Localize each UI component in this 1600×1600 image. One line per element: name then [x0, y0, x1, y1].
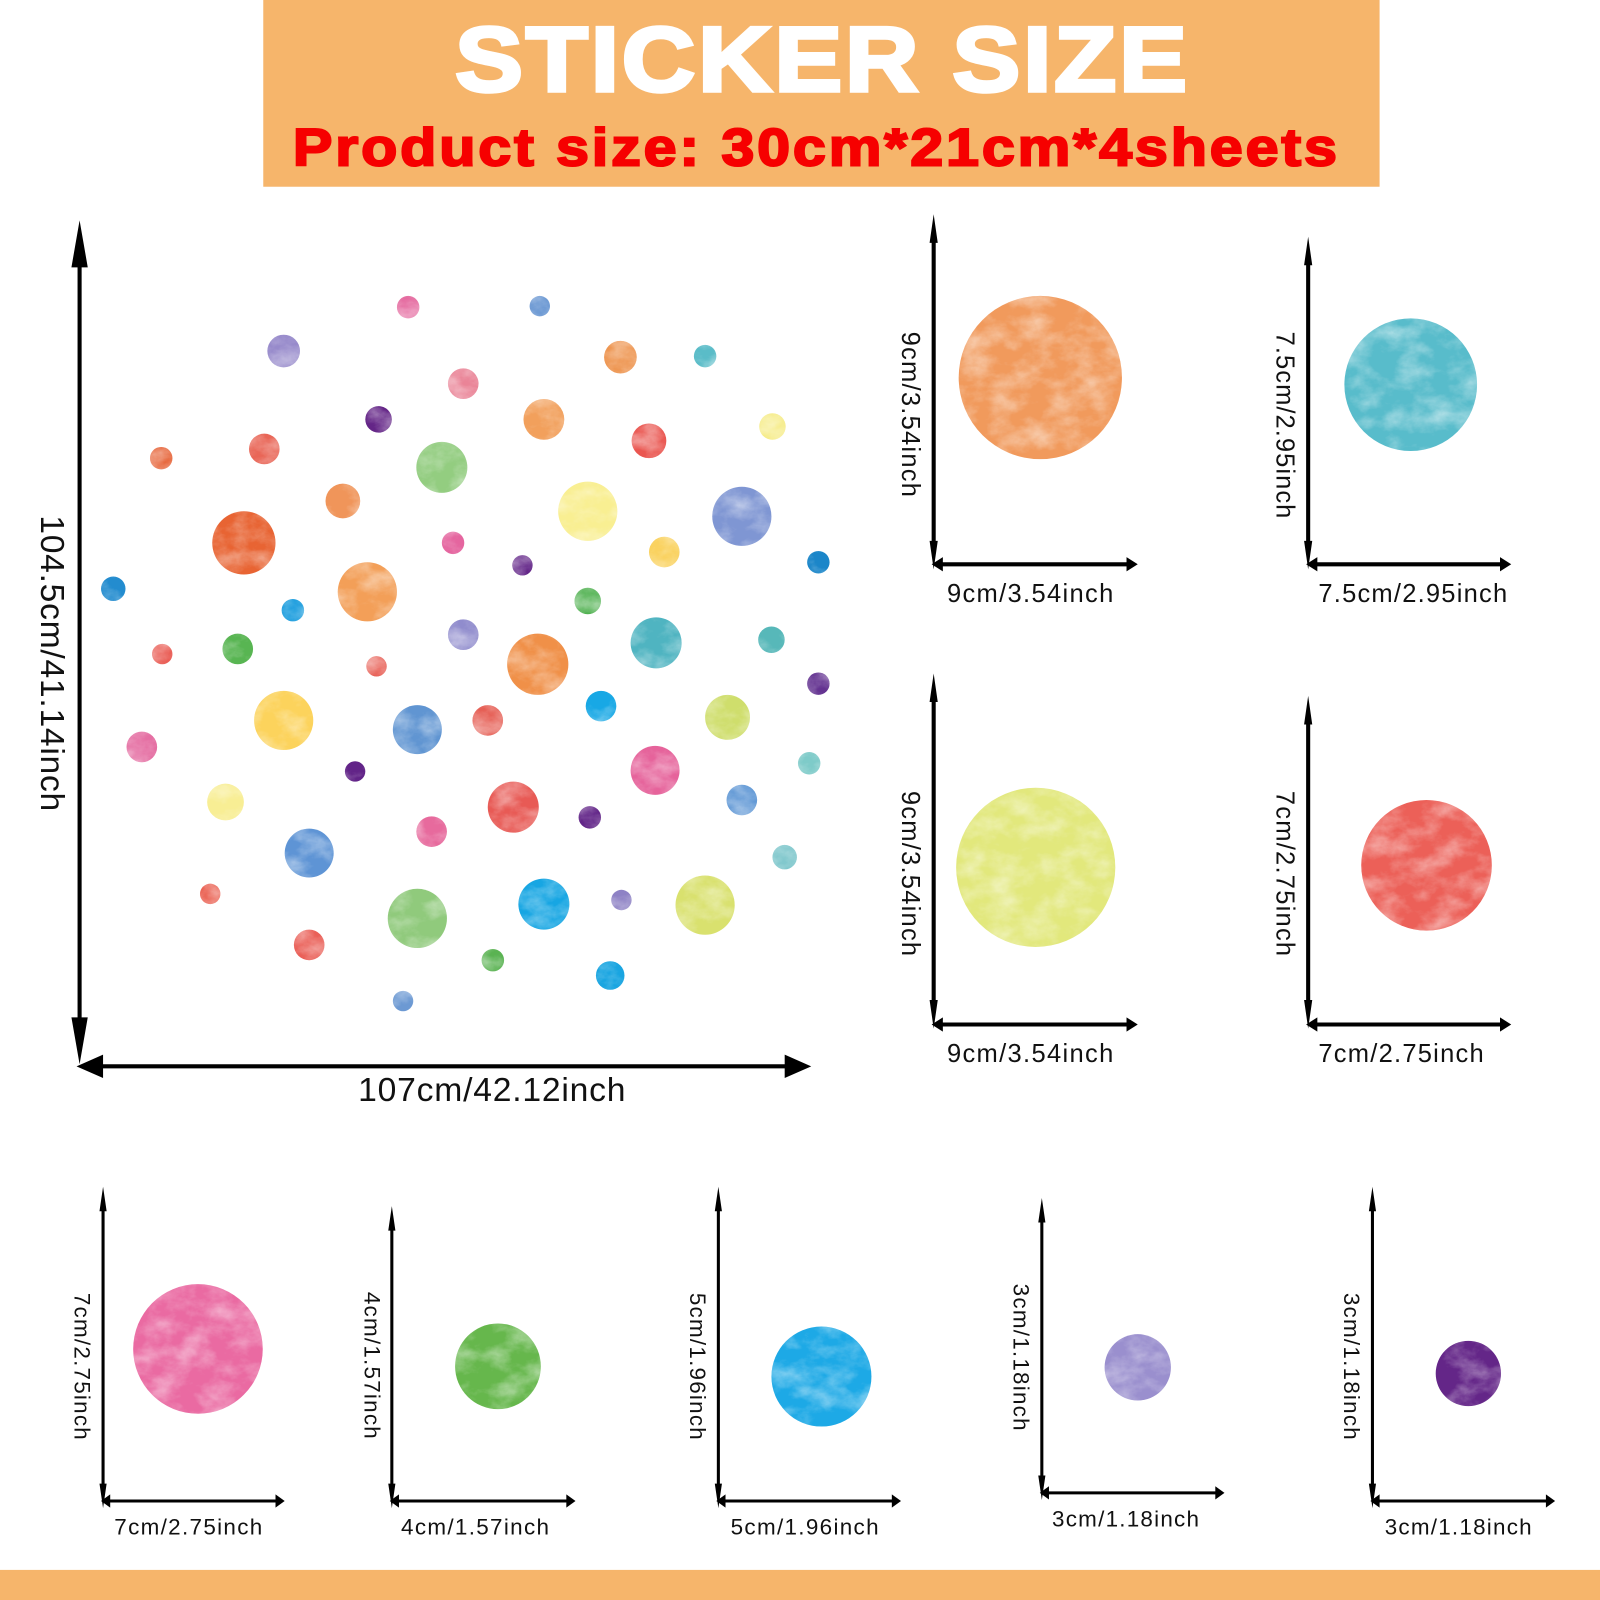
width arrow	[101, 1494, 285, 1508]
label: total width: 107cm/42.12inch	[358, 1072, 626, 1109]
panel: full sticker layout	[33, 220, 830, 1109]
width arrow	[932, 557, 1138, 571]
dot: lavender	[1105, 1334, 1171, 1401]
width label: 3cm/1.18inch	[1385, 1515, 1532, 1540]
arrow: total height	[71, 220, 88, 1064]
dot: purple	[1436, 1341, 1501, 1406]
height arrow	[1304, 237, 1312, 569]
dot: teal	[1344, 318, 1477, 451]
height label: 7.5cm/2.95inch	[1271, 332, 1299, 518]
height label: 9cm/3.54inch	[896, 791, 924, 956]
dot: red	[1361, 800, 1492, 931]
height arrow	[388, 1206, 395, 1508]
panel: lavender 3cm sticker	[1008, 1198, 1224, 1532]
width arrow	[390, 1494, 576, 1508]
height arrow	[715, 1187, 722, 1508]
height arrow	[1369, 1187, 1376, 1508]
arrow: total width	[77, 1055, 811, 1078]
height arrow	[1038, 1198, 1045, 1500]
panel: yellow 9cm sticker	[896, 673, 1138, 1068]
title: STICKER SIZE	[455, 9, 1190, 111]
width label: 5cm/1.96inch	[731, 1515, 879, 1540]
width label: 4cm/1.57inch	[401, 1515, 549, 1540]
height label: 3cm/1.18inch	[1339, 1293, 1364, 1440]
width arrow	[716, 1494, 901, 1508]
subtitle: product size: Product size: 30cm*21cm*4sheets	[293, 118, 1340, 177]
height label: 4cm/1.57inch	[359, 1292, 384, 1439]
panel: teal 7.5cm sticker	[1271, 237, 1511, 608]
height arrow	[930, 214, 938, 569]
dot cluster	[101, 296, 830, 1011]
height label: 3cm/1.18inch	[1008, 1284, 1033, 1431]
height label: 5cm/1.96inch	[685, 1293, 710, 1440]
panel: green 4cm sticker	[359, 1206, 576, 1540]
height label: 7cm/2.75inch	[69, 1293, 94, 1440]
width arrow	[932, 1017, 1138, 1032]
width label: 7cm/2.75inch	[1318, 1040, 1484, 1068]
panel: orange 9cm sticker	[896, 214, 1138, 608]
dot: sky blue	[771, 1327, 871, 1427]
panel: blue 5cm sticker	[685, 1187, 901, 1540]
width arrow	[1306, 557, 1511, 571]
width arrow	[1306, 1017, 1511, 1032]
dot: orange	[959, 296, 1122, 459]
height arrow	[99, 1187, 107, 1508]
width label: 3cm/1.18inch	[1052, 1507, 1199, 1532]
dot: pink	[133, 1284, 263, 1414]
width label: 9cm/3.54inch	[947, 1040, 1113, 1068]
width arrow	[1370, 1494, 1555, 1508]
width label: 9cm/3.54inch	[947, 580, 1113, 608]
height label: 7cm/2.75inch	[1271, 791, 1299, 956]
width label: 7.5cm/2.95inch	[1318, 580, 1507, 608]
panel: purple 3cm sticker	[1339, 1187, 1555, 1540]
dot: green	[455, 1323, 541, 1409]
panel: pink 7cm sticker	[69, 1187, 285, 1540]
height label: 9cm/3.54inch	[896, 332, 924, 497]
height arrow	[930, 673, 938, 1029]
dot: yellow-green	[956, 788, 1115, 947]
height arrow	[1304, 696, 1312, 1029]
panel: red 7cm sticker	[1271, 696, 1511, 1068]
label: total height: 104.5cm/41.14inch	[33, 515, 70, 811]
footer strip	[0, 1570, 1600, 1600]
header banner	[263, 0, 1380, 187]
width label: 7cm/2.75inch	[114, 1515, 262, 1540]
width arrow	[1040, 1486, 1224, 1499]
